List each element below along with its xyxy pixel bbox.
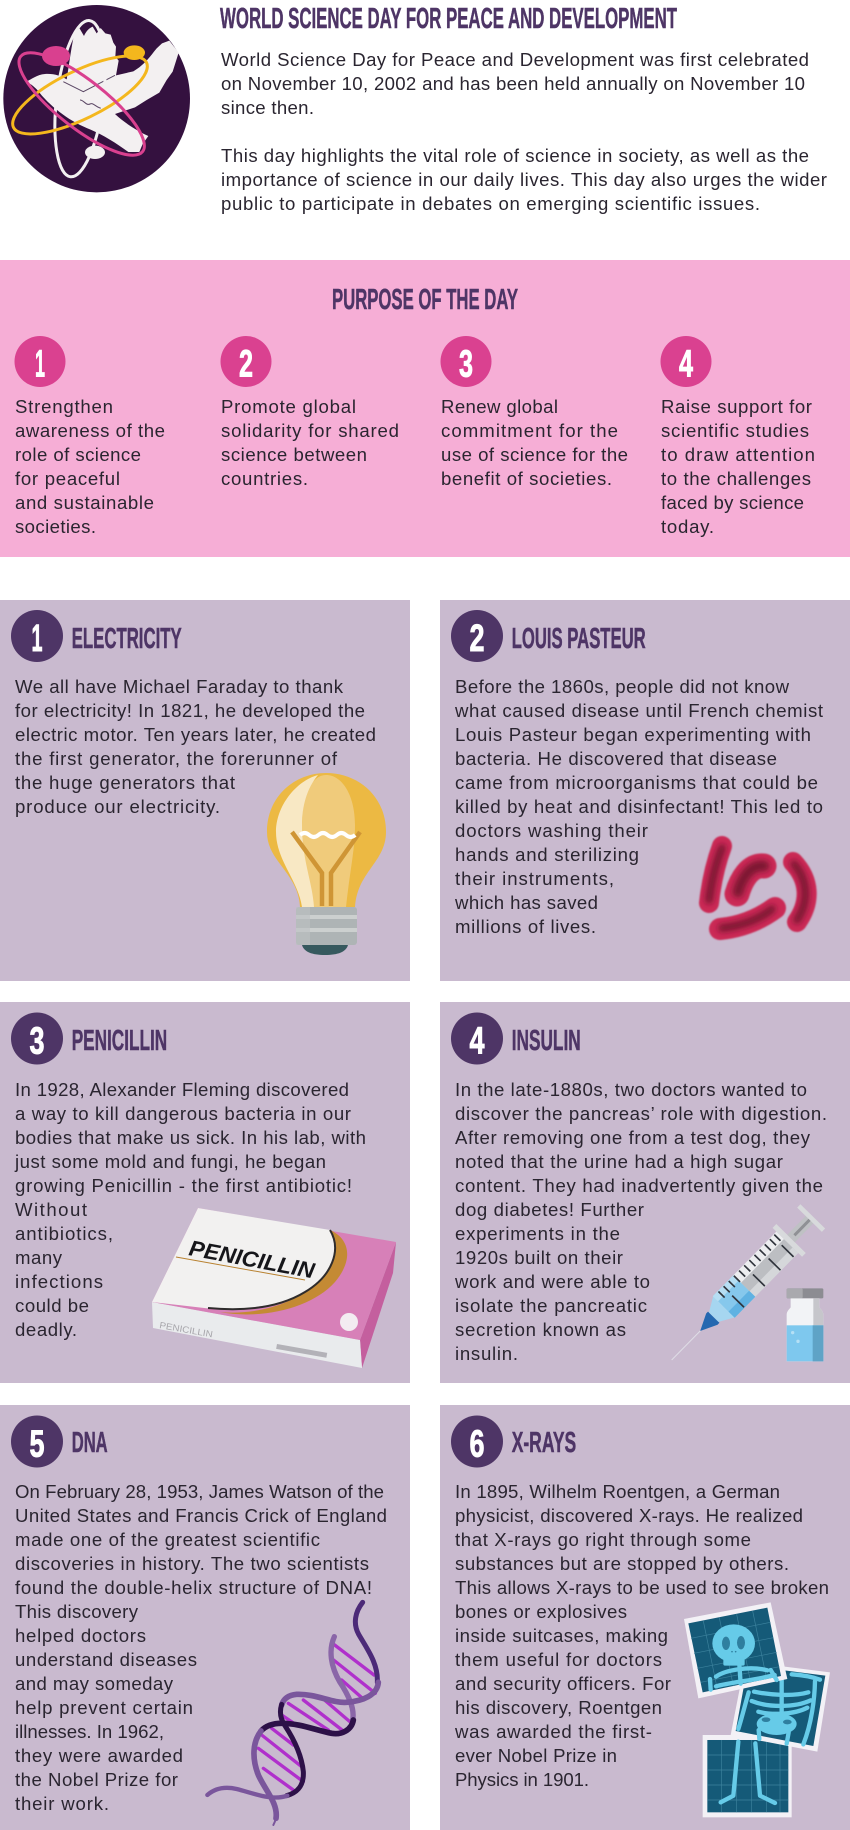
icon: bacteria bbox=[709, 846, 807, 929]
penicillin text: could be bbox=[15, 1295, 89, 1316]
x-rays text: inside suitcases, making bbox=[455, 1625, 668, 1646]
purpose heading: PURPOSE OF THE DAY bbox=[332, 284, 518, 316]
x-rays text: that X-rays go right through some bbox=[455, 1529, 751, 1550]
heading: x-rays: X-RAYS bbox=[512, 1427, 576, 1459]
electricity text: produce our electricity. bbox=[15, 796, 220, 817]
logo: dove and atom bbox=[3, 5, 190, 192]
purpose 4: faced by science bbox=[661, 492, 804, 513]
intro text: on November 10, 2002 and has been held annually on November 10 bbox=[221, 73, 805, 94]
intro text bbox=[221, 49, 827, 214]
purpose 1: Strengthen bbox=[15, 396, 113, 417]
pasteur text: which has saved bbox=[454, 892, 598, 913]
x-rays text bbox=[454, 1481, 829, 1790]
icon: penicillin box bbox=[152, 1208, 396, 1368]
dna text: found the double-helix structure of DNA! bbox=[15, 1577, 372, 1598]
dna text: and may someday bbox=[15, 1673, 174, 1694]
electricity text: electric motor. Ten years later, he created bbox=[15, 724, 376, 745]
purpose 2: countries. bbox=[221, 468, 308, 489]
purpose 2: solidarity for shared bbox=[221, 420, 399, 441]
insulin text: secretion known as bbox=[455, 1319, 626, 1340]
penicillin text: bodies that make us sick. In his lab, with bbox=[15, 1127, 366, 1148]
purpose 1: awareness of the bbox=[15, 420, 165, 441]
penicillin text: growing Penicillin - the first antibiotic! bbox=[15, 1175, 352, 1196]
icon: syringe bbox=[657, 1202, 828, 1374]
purpose 4: to the challenges bbox=[661, 468, 811, 489]
electricity text: the first generator, the forerunner of bbox=[15, 748, 338, 769]
panel: purpose of the day bbox=[0, 260, 850, 557]
number badge 6 bbox=[451, 1416, 503, 1468]
x-rays text: substances but are stopped by others. bbox=[455, 1553, 789, 1574]
number badge 4: 4 bbox=[470, 1020, 484, 1062]
electricity text: for electricity! In 1821, he developed the bbox=[15, 700, 365, 721]
number badge 1: 1 bbox=[32, 618, 42, 660]
penicillin text: infections bbox=[15, 1271, 103, 1292]
panel: dna bbox=[0, 1405, 410, 1830]
panel: louis pasteur bbox=[440, 600, 850, 981]
electricity text bbox=[15, 676, 376, 817]
insulin text: experiments in the bbox=[455, 1223, 620, 1244]
icon: light bulb bbox=[267, 773, 386, 955]
purpose 1: role of science bbox=[15, 444, 141, 465]
purpose 2 bbox=[220, 336, 399, 489]
panel: penicillin bbox=[0, 1002, 410, 1383]
purpose 4: today. bbox=[661, 516, 714, 537]
pasteur text: millions of lives. bbox=[455, 916, 596, 937]
insulin text: work and were able to bbox=[454, 1271, 650, 1292]
penicillin text: In 1928, Alexander Fleming discovered bbox=[15, 1079, 349, 1100]
electricity text: We all have Michael Faraday to thank bbox=[15, 676, 344, 697]
insulin text: After removing one from a test dog, they bbox=[455, 1127, 811, 1148]
x-rays text: This allows X-rays to be used to see broken bbox=[455, 1577, 829, 1598]
panel: x-rays bbox=[440, 1405, 850, 1830]
dna text: made one of the greatest scientific bbox=[15, 1529, 320, 1550]
x-rays text: bones or explosives bbox=[455, 1601, 627, 1622]
icon: dna helix bbox=[207, 1602, 378, 1825]
purpose 1: for peaceful bbox=[15, 468, 120, 489]
insulin text: 1920s built on their bbox=[455, 1247, 623, 1268]
purpose 3: use of science for the bbox=[441, 444, 628, 465]
x-rays text: was awarded the first- bbox=[454, 1721, 652, 1742]
purpose 4: to draw attention bbox=[661, 444, 815, 465]
panel: insulin bbox=[440, 1002, 850, 1383]
dna text: On February 28, 1953, James Watson of the bbox=[15, 1481, 384, 1502]
purpose 2: Promote global bbox=[221, 396, 356, 417]
intro text: since then. bbox=[221, 97, 314, 118]
purpose 1: 1 bbox=[35, 344, 45, 386]
insulin text bbox=[454, 1079, 827, 1364]
insulin text: In the late-1880s, two doctors wanted to bbox=[455, 1079, 807, 1100]
pasteur text bbox=[454, 676, 824, 937]
penicillin text: Without bbox=[15, 1199, 88, 1220]
purpose 1 bbox=[14, 336, 165, 537]
x-rays text: his discovery, Roentgen bbox=[455, 1697, 662, 1718]
x-ray sheet: torso bbox=[731, 1662, 830, 1752]
x-rays text: ever Nobel Prize in bbox=[455, 1745, 617, 1766]
icon: vial bbox=[787, 1288, 823, 1361]
x-rays text: and security officers. For bbox=[455, 1673, 671, 1694]
dna text: discoveries in history. The two scientists bbox=[15, 1553, 369, 1574]
heading: electricity: ELECTRICITY bbox=[72, 623, 182, 655]
dna text: helped doctors bbox=[15, 1625, 146, 1646]
dna text: United States and Francis Crick of England bbox=[15, 1505, 387, 1526]
purpose 4 bbox=[660, 336, 815, 537]
electricity text: the huge generators that bbox=[15, 772, 236, 793]
heading: penicillin: PENICILLIN bbox=[72, 1025, 167, 1057]
insulin text: discover the pancreas’ role with digestion. bbox=[455, 1103, 827, 1124]
purpose 4: Raise support for bbox=[661, 396, 812, 417]
purpose 1: and sustainable bbox=[15, 492, 154, 513]
dna text: the Nobel Prize for bbox=[15, 1769, 178, 1790]
pasteur text: came from microorganisms that could be bbox=[455, 772, 818, 793]
number badge 6: 6 bbox=[470, 1424, 484, 1466]
penicillin text: antibiotics, bbox=[15, 1223, 113, 1244]
dna text: understand diseases bbox=[15, 1649, 197, 1670]
pasteur text: what caused disease until French chemist bbox=[454, 700, 824, 721]
purpose 3: benefit of societies. bbox=[441, 468, 612, 489]
purpose 3: Renew global bbox=[441, 396, 558, 417]
pasteur text: doctors washing their bbox=[455, 820, 648, 841]
penicillin text: just some mold and fungi, he began bbox=[14, 1151, 326, 1172]
purpose 4: scientific studies bbox=[661, 420, 809, 441]
heading: insulin: INSULIN bbox=[512, 1025, 581, 1057]
penicillin text: many bbox=[15, 1247, 63, 1268]
x-rays text: In 1895, Wilhelm Roentgen, a German bbox=[455, 1481, 780, 1502]
intro text: World Science Day for Peace and Development was first celebrated bbox=[221, 49, 809, 70]
purpose 3 bbox=[440, 336, 628, 489]
panel: electricity bbox=[0, 600, 410, 981]
dna text bbox=[15, 1481, 387, 1814]
insulin text: noted that the urine had a high sugar bbox=[455, 1151, 783, 1172]
insulin text: dog diabetes! Further bbox=[455, 1199, 644, 1220]
purpose 2: 2 bbox=[239, 344, 253, 386]
dna text: illnesses. In 1962, bbox=[15, 1721, 164, 1742]
intro text: This day highlights the vital role of science in society, as well as the bbox=[221, 145, 809, 166]
number badge 5: 5 bbox=[30, 1424, 44, 1466]
number badge 5 bbox=[11, 1416, 63, 1468]
x-rays text: physicist, discovered X-rays. He realized bbox=[455, 1505, 803, 1526]
penicillin text: deadly. bbox=[15, 1319, 77, 1340]
penicillin text bbox=[14, 1079, 366, 1340]
dna text: This discovery bbox=[15, 1601, 139, 1622]
pasteur text: Louis Pasteur began experimenting with bbox=[455, 724, 811, 745]
purpose 3: commitment for the bbox=[441, 420, 618, 441]
purpose 3: 3 bbox=[459, 344, 473, 386]
number badge 3: 3 bbox=[30, 1020, 44, 1062]
heading: louis pasteur: LOUIS PASTEUR bbox=[512, 623, 646, 655]
dna text: they were awarded bbox=[15, 1745, 183, 1766]
icon: penicillin box: PENICILLIN bbox=[159, 1320, 214, 1339]
dna text: their work. bbox=[15, 1793, 109, 1814]
pasteur text: Before the 1860s, people did not know bbox=[455, 676, 790, 697]
x-ray sheet: skull bbox=[684, 1602, 787, 1698]
number badge 2: 2 bbox=[470, 618, 484, 660]
purpose 2: science between bbox=[221, 444, 367, 465]
insulin text: insulin. bbox=[455, 1343, 518, 1364]
insulin text: content. They had inadvertently given the bbox=[455, 1175, 823, 1196]
number badge 4 bbox=[451, 1012, 503, 1064]
pasteur text: their instruments, bbox=[455, 868, 614, 889]
number badge 2 bbox=[451, 610, 503, 662]
purpose 1: societies. bbox=[15, 516, 96, 537]
pasteur text: killed by heat and disinfectant! This led to bbox=[455, 796, 823, 817]
number badge 1 bbox=[11, 610, 63, 662]
x-rays text: them useful for doctors bbox=[455, 1649, 662, 1670]
intro text: public to participate in debates on emerging scientific issues. bbox=[221, 193, 760, 214]
icon: x-ray sheets bbox=[684, 1602, 830, 1817]
x-rays text: Physics in 1901. bbox=[455, 1769, 589, 1790]
insulin text: isolate the pancreatic bbox=[455, 1295, 647, 1316]
heading: dna: DNA bbox=[72, 1427, 108, 1459]
number badge 3 bbox=[11, 1012, 63, 1064]
penicillin text: a way to kill dangerous bacteria in our bbox=[15, 1103, 351, 1124]
dna text: help prevent certain bbox=[15, 1697, 193, 1718]
icon: penicillin box: PENICILLIN bbox=[187, 1235, 318, 1283]
purpose 4: 4 bbox=[679, 344, 693, 386]
intro text: importance of science in our daily lives. This day also urges the wider bbox=[221, 169, 827, 190]
pasteur text: bacteria. He discovered that disease bbox=[455, 748, 777, 769]
x-ray sheet: legs bbox=[703, 1735, 792, 1817]
pasteur text: hands and sterilizing bbox=[455, 844, 639, 865]
